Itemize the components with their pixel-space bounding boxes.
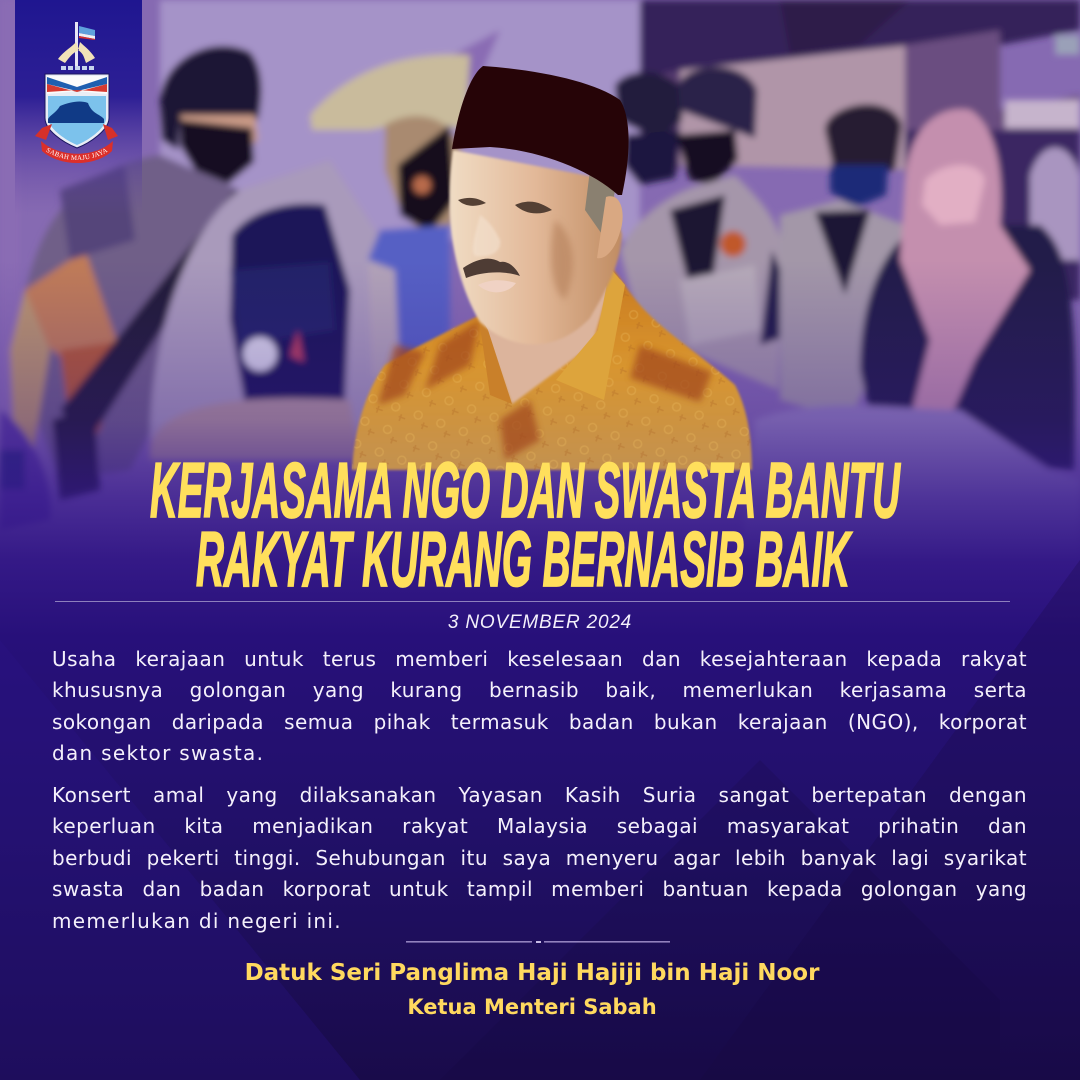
- hands holding the pole: [58, 42, 95, 63]
- paragraph 2: [52, 783, 1027, 933]
- paragraph 2: Konsert amal yang dilaksanakan Yayasan Kasih Suria sangat bertepatan dengan: [52, 783, 1027, 807]
- far left volunteer: [10, 46, 261, 500]
- logo strip: [15, 0, 142, 215]
- woman in pink hijab: [860, 109, 1075, 470]
- divider line: [55, 601, 1010, 602]
- crest: Sabah coat of arms: [35, 22, 118, 163]
- dark purple gradient overlay: [0, 260, 1080, 1080]
- ornament divider: [406, 941, 670, 943]
- right side volunteers: [615, 67, 905, 420]
- date: 3 NOVEMBER 2024: [448, 612, 632, 633]
- paragraph 2: keperluan kita menjadikan rakyat Malaysia sebagai masyarakat prihatin dan: [52, 814, 1027, 838]
- flag: [75, 22, 95, 66]
- paragraph 2: swasta dan badan korporat untuk tampil memberi bantuan kepada golongan yang: [52, 877, 1027, 901]
- portrait: chief minister: [352, 66, 752, 470]
- paragraph 1: sokongan daripada semua pihak termasuk badan bukan kerajaan (NGO), korporat: [52, 710, 1027, 734]
- bags on table: [740, 406, 1080, 560]
- face: [449, 150, 622, 344]
- signature title: Ketua Menteri Sabah: [407, 995, 657, 1019]
- shirt: [352, 265, 752, 470]
- paragraph 1: khususnya golongan yang kurang bernasib baik, memerlukan kerjasama serta: [52, 678, 1027, 702]
- paragraph 1: Usaha kerajaan untuk terus memberi keselesaan dan kesejahteraan kepada rakyat: [52, 647, 1027, 671]
- paragraph 2: berbudi pekerti tinggi. Sehubungan itu saya menyeru agar lebih banyak lagi syarikat: [52, 846, 1027, 870]
- second volunteer in white vest: [150, 54, 470, 460]
- headline: [150, 446, 901, 603]
- shield: [45, 74, 109, 148]
- signature name: Datuk Seri Panglima Haji Hajiji bin Haji Noor: [245, 960, 819, 986]
- paragraph 2: memerlukan di negeri ini.: [52, 909, 342, 933]
- songkok cap: [452, 66, 629, 195]
- ribbon: SABAH MAJU JAYA: [46, 148, 108, 160]
- ribbon: [35, 124, 118, 163]
- paragraph 1: [52, 647, 1027, 765]
- paragraph 1: dan sektor swasta.: [52, 741, 264, 765]
